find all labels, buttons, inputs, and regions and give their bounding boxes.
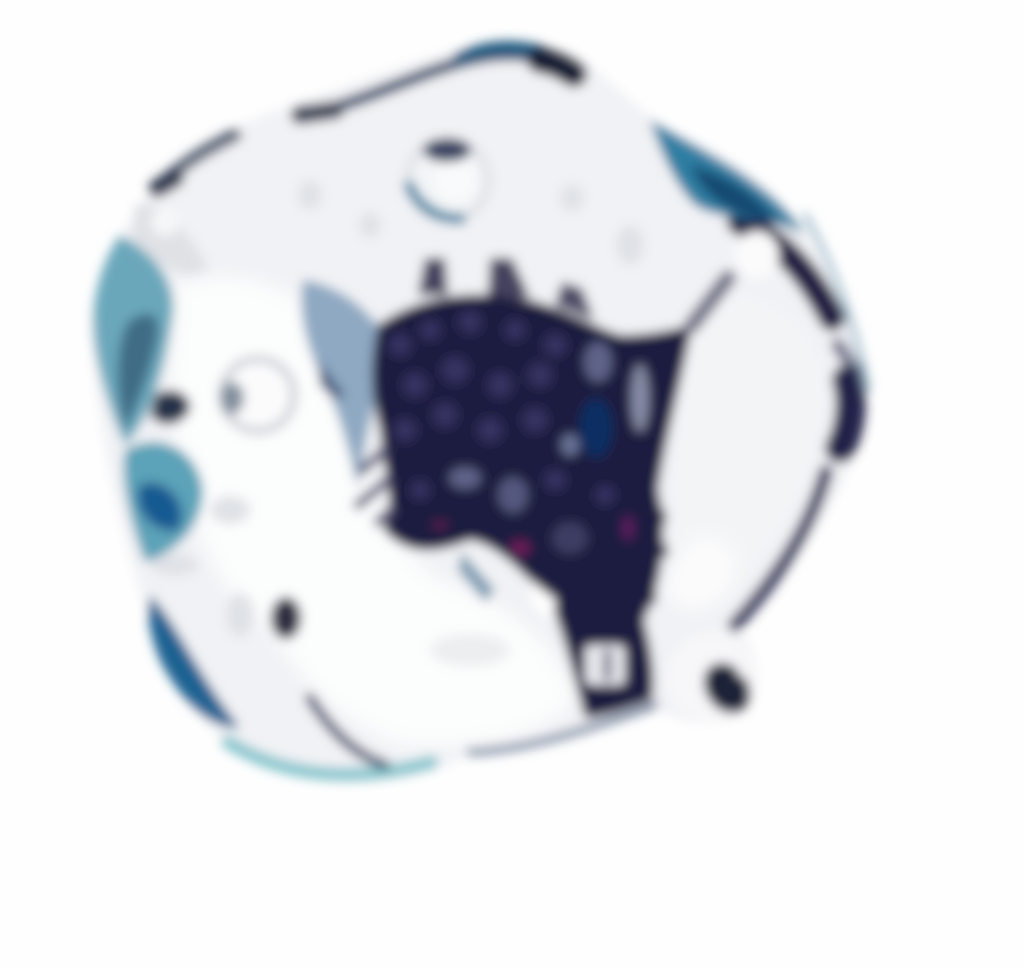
blob body	[90, 44, 866, 782]
white spot at upper right	[735, 231, 779, 279]
nucleus: blue and magenta spots	[579, 398, 613, 458]
blurred artwork	[90, 44, 868, 782]
square at base of nucleus	[585, 645, 625, 685]
nucleus: dark mass	[372, 295, 692, 718]
teal left patches	[93, 235, 173, 445]
teal top-right patch	[650, 120, 805, 235]
nucleus: top knobs	[418, 258, 448, 295]
vesicle: left ring	[222, 359, 294, 431]
nucleus: speckle mottling	[388, 310, 615, 505]
nucleus: right edge teeth	[640, 510, 668, 604]
diagonal streak	[692, 278, 728, 325]
outer edge strokes	[155, 49, 868, 774]
nucleus: blue-grey lobe	[301, 280, 388, 490]
nucleus: feathered left edge	[358, 450, 392, 522]
small dark spot	[271, 597, 301, 639]
vesicle: top ring	[408, 140, 488, 220]
nucleus: bottom notch details	[458, 552, 495, 602]
grey textured area upper left	[132, 204, 208, 275]
pale regions	[170, 277, 825, 746]
nucleus: light spots	[449, 342, 649, 554]
small grey spots	[151, 180, 644, 666]
round bud at lower right	[666, 632, 758, 724]
